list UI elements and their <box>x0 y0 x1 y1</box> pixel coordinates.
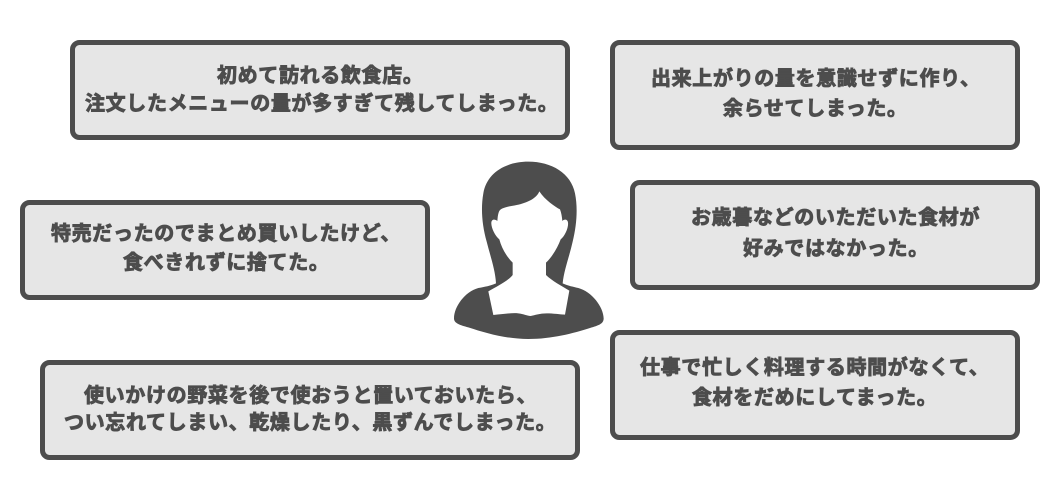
panel: restaurant portion <box>72 42 568 138</box>
text: forgotten vegetables: 使いかけの野菜を後で使おうと置いておいたら、 <box>84 384 537 407</box>
text: too busy to cook: 食材をだめにしてまった。 <box>692 386 937 409</box>
panel: forgotten vegetables <box>42 362 578 458</box>
text: bulk purchase <box>51 222 401 274</box>
text: cooked too much: 出来上がりの量を意識せずに作り、 <box>651 66 981 90</box>
panel: bulk purchase <box>22 202 428 298</box>
panel: too busy to cook <box>612 332 1018 438</box>
text: restaurant portion <box>85 64 559 115</box>
text: forgotten vegetables <box>64 384 556 434</box>
text: forgotten vegetables: つい忘れてしまい、乾燥したり、黒ずんでしまった。 <box>64 411 556 434</box>
text: too busy to cook: 仕事で忙しく料理する時間がなくて、 <box>640 355 989 379</box>
text: bulk purchase: 食べきれずに捨てた。 <box>123 251 330 274</box>
text: restaurant portion: 初めて訪れる飲食店。 <box>217 64 424 87</box>
panel: gifted food <box>632 182 1038 288</box>
text: cooked too much: 余らせてしまった。 <box>723 97 908 120</box>
text: bulk purchase: 特売だったのでまとめ買いしたけど、 <box>51 222 401 245</box>
text: restaurant portion: 注文したメニューの量が多すぎて残してしまった。 <box>85 91 559 115</box>
icon: woman silhouette <box>454 162 604 339</box>
text: too busy to cook <box>640 355 989 409</box>
text: cooked too much <box>651 66 981 120</box>
text: gifted food: 好みではなかった。 <box>743 237 929 260</box>
panel: cooked too much <box>612 42 1018 148</box>
text: gifted food: お歳暮などのいただいた食材が <box>691 205 980 229</box>
text: gifted food <box>691 205 980 260</box>
